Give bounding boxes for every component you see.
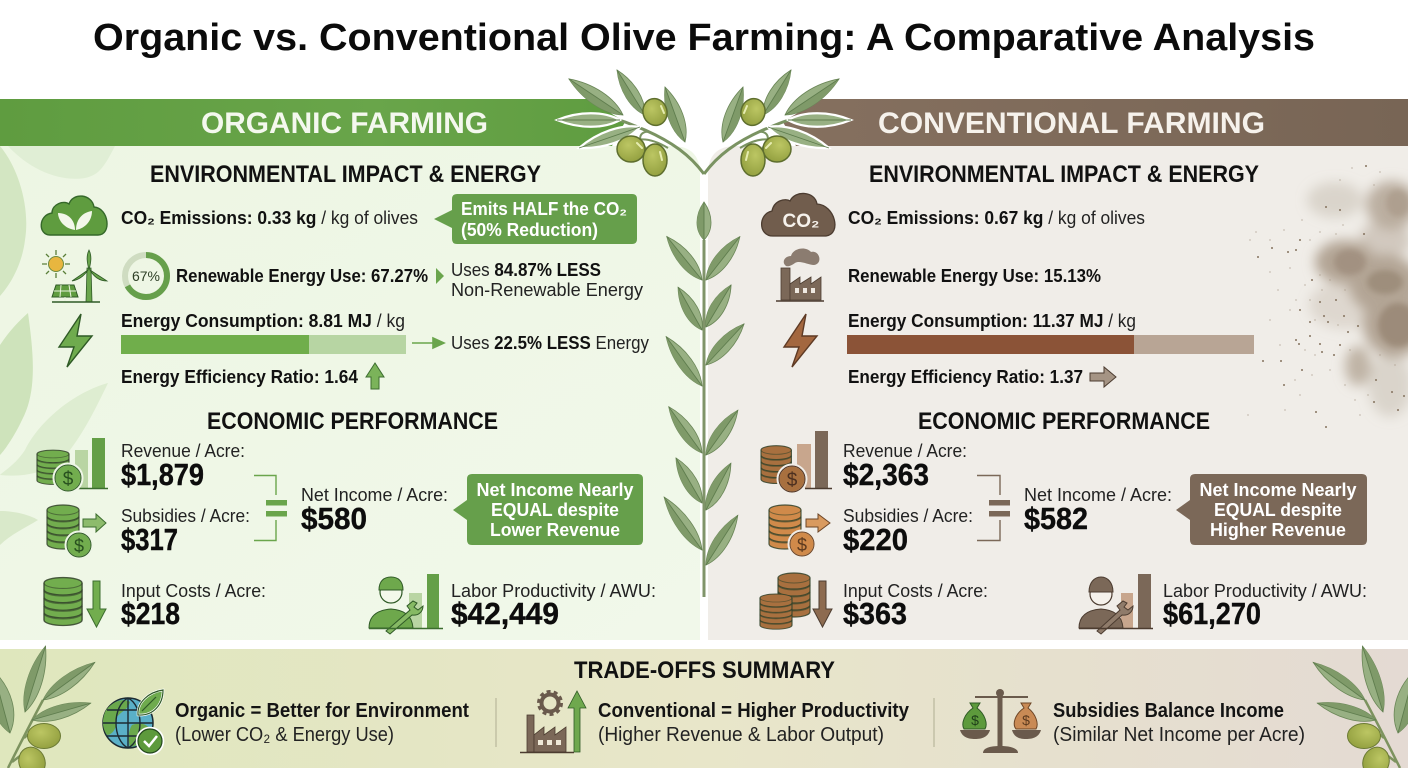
organic header xyxy=(0,99,625,146)
energy saving text: Uses 22.5% LESS Energy xyxy=(451,333,649,353)
organic header: ORGANIC FARMING xyxy=(201,107,488,140)
background leaves xyxy=(0,146,115,545)
icon: bolt xyxy=(784,314,817,367)
labor productivity text: $61,270 xyxy=(1163,596,1261,631)
revenue text xyxy=(121,441,245,492)
subsidies text: Subsidies / Acre: xyxy=(843,506,973,526)
efficiency ratio text: Energy Efficiency Ratio: 1.37 xyxy=(848,367,1083,387)
dust cloud xyxy=(1248,166,1408,427)
conventional header: CONVENTIONAL FARMING xyxy=(878,107,1265,140)
subsidies text: $220 xyxy=(843,522,908,557)
revenue text xyxy=(843,441,967,492)
heading: economic performance: ECONOMIC PERFORMANCE xyxy=(918,408,1210,435)
icon: globe xyxy=(103,690,163,754)
conventional header xyxy=(783,99,1408,146)
callout: net income: Net Income Nearly xyxy=(1200,480,1356,500)
net income text: $580 xyxy=(301,501,367,536)
energy consumption text: Energy Consumption: 8.81 MJ / kg xyxy=(121,311,405,331)
revenue text: Revenue / Acre: xyxy=(843,441,967,461)
labor productivity text xyxy=(1163,581,1367,631)
heading: economic performance: ECONOMIC PERFORMANCE xyxy=(207,408,498,435)
icon: balance scale: $ xyxy=(971,712,979,728)
net income text xyxy=(1024,485,1172,536)
labor productivity text: $42,449 xyxy=(451,596,559,631)
olive branch: right xyxy=(704,66,851,176)
panel: organic farming xyxy=(0,99,700,640)
icon: subsidies xyxy=(769,505,830,557)
icon: co2 cloud: CO₂ xyxy=(783,211,819,232)
renewable energy text: Renewable Energy Use: 15.13% xyxy=(848,266,1101,286)
icon: leaf cloud xyxy=(41,196,107,235)
revenue text: Revenue / Acre: xyxy=(121,441,245,461)
icon: factory xyxy=(776,249,824,301)
input costs text: Input Costs / Acre: xyxy=(843,581,988,601)
efficiency ratio text: Energy Efficiency Ratio: 1.64 xyxy=(121,367,358,387)
icon: subsidies: $ xyxy=(74,536,84,556)
callout: half co2 xyxy=(434,194,637,244)
energy consumption text: Energy Consumption: 11.37 MJ / kg xyxy=(848,311,1136,331)
donut chart: 67%: 67% xyxy=(132,268,160,284)
organic takeaway text: (Lower CO₂ & Energy Use) xyxy=(175,724,394,746)
icon: input costs xyxy=(44,578,106,627)
olive branch: left xyxy=(557,66,704,176)
renewable comparison text xyxy=(451,260,643,300)
labor productivity text xyxy=(451,581,656,631)
arrow up xyxy=(366,363,384,389)
arrow right xyxy=(1090,367,1116,387)
heading: environmental impact: ENVIRONMENTAL IMPACT & ENERGY xyxy=(150,161,541,188)
panel: trade-offs summary xyxy=(0,644,1408,768)
net income text: Net Income / Acre: xyxy=(301,485,448,505)
net income text: Net Income / Acre: xyxy=(1024,485,1172,505)
input costs text: $218 xyxy=(121,596,180,631)
callout: net income xyxy=(453,474,643,545)
subsidies text xyxy=(121,506,250,557)
renewable comparison text: Non-Renewable Energy xyxy=(451,280,643,300)
icon: balance scale: $ xyxy=(1022,712,1030,728)
icon: subsidies xyxy=(47,505,106,558)
heading: trade-offs: TRADE-OFFS SUMMARY xyxy=(574,657,835,684)
icon: subsidies: $ xyxy=(797,535,807,555)
subsidies text: Subsidies / Acre: xyxy=(121,506,250,526)
icon: sun wind solar xyxy=(42,250,107,302)
input costs text xyxy=(121,581,266,631)
icon: input costs xyxy=(760,573,832,629)
icon: revenue: $ xyxy=(787,470,798,491)
labor productivity text: Labor Productivity / AWU: xyxy=(451,581,656,601)
arrow xyxy=(412,338,444,348)
icon: revenue: $ xyxy=(63,469,74,490)
donut chart: 67% xyxy=(125,255,167,297)
organic takeaway text xyxy=(175,700,469,746)
icon: labor productivity xyxy=(369,574,443,634)
icon: revenue xyxy=(37,438,108,492)
bar: energy consumption xyxy=(121,335,406,354)
co2 emissions text: CO₂ Emissions: 0.67 kg / kg of olives xyxy=(848,208,1145,228)
conventional takeaway text xyxy=(598,700,910,746)
callout: net income: Net Income Nearly xyxy=(476,480,634,500)
net income text: $582 xyxy=(1024,501,1088,536)
subsidies takeaway text: Subsidies Balance Income xyxy=(1053,700,1284,722)
revenue text: $1,879 xyxy=(121,457,204,492)
icon: bolt xyxy=(59,314,92,367)
net income text xyxy=(301,485,448,536)
renewable energy text: Renewable Energy Use: 67.27% xyxy=(176,266,428,286)
icon: factory with gear and arrow xyxy=(520,691,586,752)
subsidies takeaway text xyxy=(1053,700,1305,746)
arrow xyxy=(436,268,444,284)
input costs text: $363 xyxy=(843,596,907,631)
subsidies text xyxy=(843,506,973,557)
corner olive branch: right xyxy=(1309,644,1408,768)
bar: energy consumption xyxy=(847,335,1254,354)
icon: labor productivity xyxy=(1079,574,1153,634)
input costs text: Input Costs / Acre: xyxy=(121,581,266,601)
central olive stem xyxy=(658,202,749,597)
renewable comparison text: Uses 84.87% LESS xyxy=(451,260,601,280)
co2 emissions text: CO₂ Emissions: 0.33 kg / kg of olives xyxy=(121,208,418,228)
heading: environmental impact: ENVIRONMENTAL IMPACT & ENERGY xyxy=(869,161,1259,188)
callout: half co2: (50% Reduction) xyxy=(461,220,598,240)
icon: balance scale xyxy=(960,689,1041,753)
icon: co2 cloud xyxy=(762,193,835,236)
panel: conventional farming xyxy=(708,99,1408,640)
callout: net income: Higher Revenue xyxy=(1210,520,1346,540)
icon: revenue xyxy=(761,431,832,493)
revenue text: $2,363 xyxy=(843,457,929,492)
input costs text xyxy=(843,581,988,631)
conventional takeaway text: Conventional = Higher Productivity xyxy=(598,700,910,722)
bracket equals xyxy=(977,476,1010,540)
bracket equals xyxy=(254,476,287,540)
subsidies takeaway text: (Similar Net Income per Acre) xyxy=(1053,724,1305,746)
callout: net income: EQUAL despite xyxy=(491,500,619,520)
callout: net income xyxy=(1176,474,1367,545)
labor productivity text: Labor Productivity / AWU: xyxy=(1163,581,1367,601)
corner olive branch: left xyxy=(0,644,99,768)
organic takeaway text: Organic = Better for Environment xyxy=(175,700,469,722)
callout: net income: Lower Revenue xyxy=(490,520,620,540)
conventional takeaway text: (Higher Revenue & Labor Output) xyxy=(598,724,884,746)
callout: half co2: Emits HALF the CO₂ xyxy=(461,199,627,219)
subsidies text: $317 xyxy=(121,522,178,557)
title: Organic vs. Conventional Olive Farming: A Comparative Analysis xyxy=(93,17,1315,59)
callout: net income: EQUAL despite xyxy=(1214,500,1342,520)
